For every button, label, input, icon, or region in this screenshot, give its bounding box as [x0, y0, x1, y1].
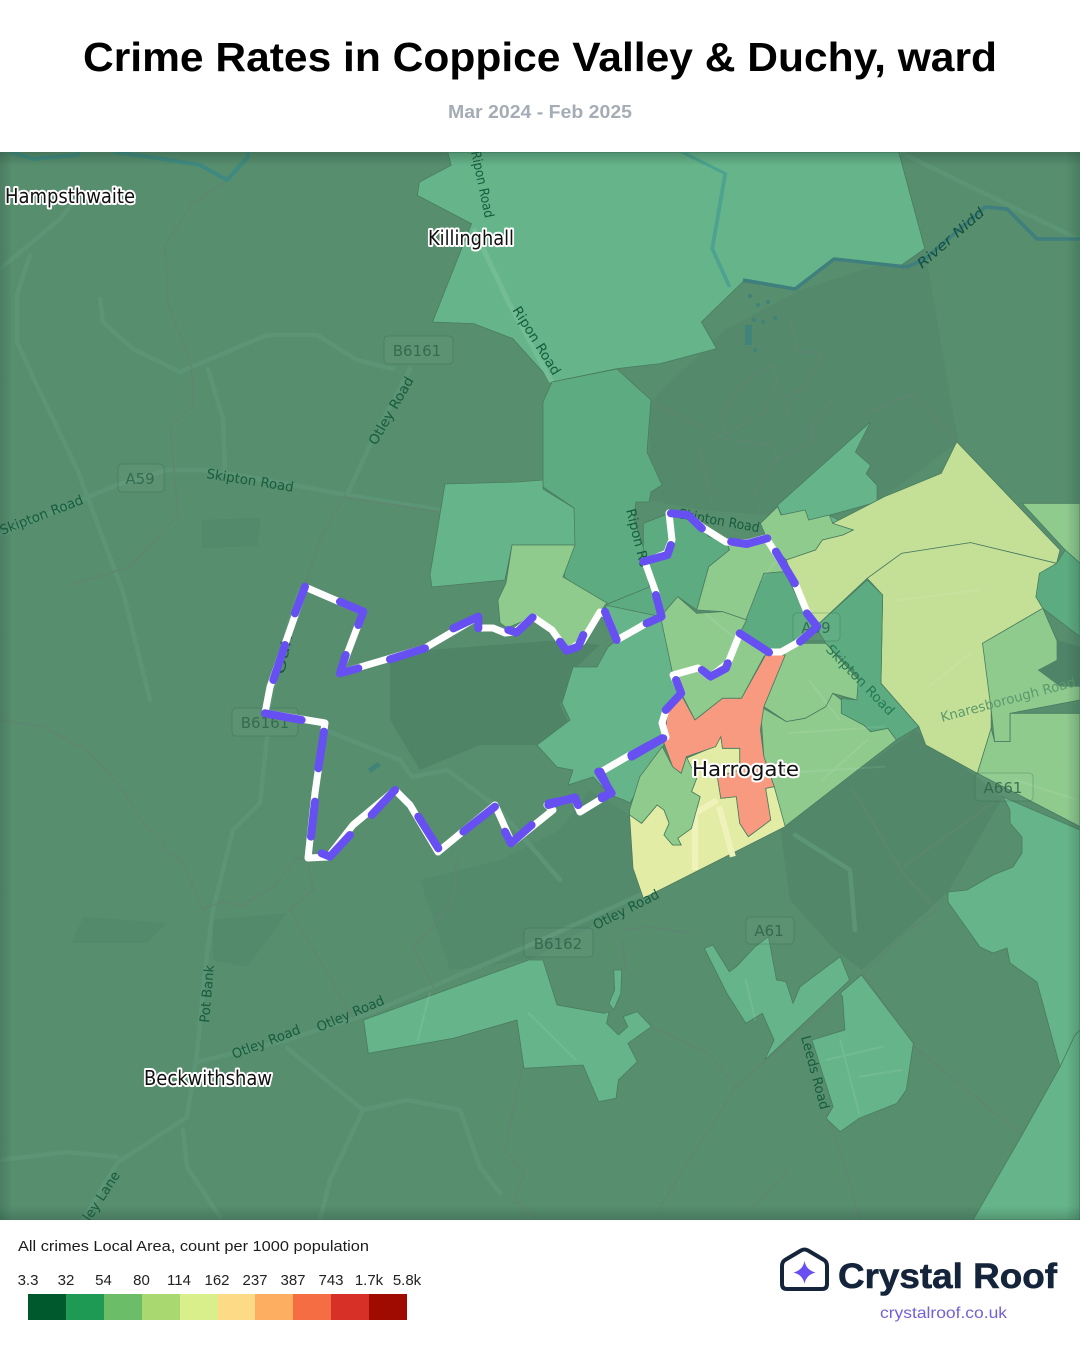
legend scale values: 114	[167, 1272, 191, 1289]
rate area: east of A61	[948, 797, 1080, 1067]
title: Crime Rates in Coppice Valley & Duchy, ward	[83, 34, 997, 80]
website: crystalroof.co.uk	[880, 1305, 1008, 1322]
road number badges: A61	[754, 922, 784, 940]
road number badges: A59	[801, 619, 831, 637]
legend scale values: 387	[280, 1272, 306, 1289]
legend colour scale	[28, 1294, 407, 1320]
rate area: west Harrogate	[537, 605, 681, 803]
road name labels: ley Lane	[80, 1168, 124, 1224]
road name labels: Ripon Road	[509, 304, 564, 378]
rate area: north-east suburb	[777, 422, 878, 522]
icon: house with star	[782, 1250, 827, 1289]
road name labels: Leeds Road	[797, 1034, 832, 1111]
road name labels	[0, 150, 1077, 1224]
legend scale values: 1.7k	[355, 1272, 384, 1289]
rate area: south-east corner	[973, 1030, 1080, 1220]
rate area: light green north-west	[498, 545, 607, 652]
road name labels: Otley Road	[366, 374, 417, 448]
legend scale values: 237	[242, 1272, 268, 1289]
subtitle: date range: Mar 2024 - Feb 2025	[448, 102, 632, 122]
river Nidd	[743, 207, 1080, 289]
road name labels: Ripon Road	[467, 150, 497, 219]
road name labels: Skipton Road	[677, 506, 761, 536]
road name labels: Oak	[272, 633, 296, 676]
darker woodland and suburb base patches	[390, 640, 600, 770]
road number badges: B6162	[534, 935, 582, 953]
place name labels: Harrogate	[692, 757, 799, 781]
rate area: Ripon Road corridor	[543, 369, 662, 610]
road number badges	[118, 336, 1033, 957]
road name labels: Otley Road	[230, 1022, 303, 1063]
road name labels: Ripon Ro	[622, 507, 652, 569]
rate area: Harrogate centre, highest crime rate	[664, 655, 785, 837]
map edge vignette	[0, 152, 1080, 1220]
road number badges: A59	[125, 470, 155, 488]
legend heading: All crimes Local Area, count per 1000 population	[18, 1238, 369, 1255]
rate area: Harrogate south-west light green	[630, 747, 700, 845]
legend scale values: 5.8k	[393, 1272, 422, 1289]
rate area: west of Ripon Road	[430, 480, 575, 587]
wordmark: Crystal Roof	[838, 1257, 1057, 1296]
road name labels: River Nidd	[914, 205, 988, 272]
logo: Crystal Roof	[782, 1250, 1057, 1322]
place name labels: Beckwithshaw	[144, 1066, 272, 1090]
road name labels: Otley Road	[591, 887, 662, 934]
road name labels: Skipton Road	[0, 492, 86, 539]
rate area: Harrogate south pale yellow	[630, 737, 785, 898]
road number badges: A661	[984, 779, 1022, 797]
road name labels: Skipton Road	[205, 466, 295, 496]
background roads and rivers	[0, 152, 1080, 1220]
legend scale values: 80	[133, 1272, 150, 1289]
road name labels: Skipton Road	[822, 642, 898, 719]
road number badges: B6161	[241, 714, 289, 732]
legend	[18, 1238, 422, 1320]
legend scale values	[18, 1272, 422, 1289]
legend scale values: 162	[204, 1272, 230, 1289]
road name labels: Pot Bank	[197, 964, 218, 1023]
place name labels: Hampsthwaite	[5, 184, 135, 208]
rate areas: north-east districts	[605, 442, 1080, 898]
place name labels: Killinghall	[428, 226, 514, 250]
rate area: north of Killinghall	[417, 152, 925, 382]
ward boundary: Coppice Valley & Duchy	[265, 513, 817, 858]
rate areas: south of Otley Road and Leeds Road	[364, 937, 913, 1132]
legend scale values: 54	[95, 1272, 112, 1289]
legend scale values: 3.3	[18, 1272, 38, 1289]
choropleth map	[0, 150, 1080, 1224]
road name labels: Otley Road	[314, 993, 387, 1036]
road number badges: B6161	[393, 342, 441, 360]
place name labels	[5, 184, 799, 1090]
road name labels: Knaresborough Road	[939, 674, 1077, 726]
legend scale values: 32	[58, 1272, 74, 1289]
legend scale values: 743	[318, 1272, 344, 1289]
